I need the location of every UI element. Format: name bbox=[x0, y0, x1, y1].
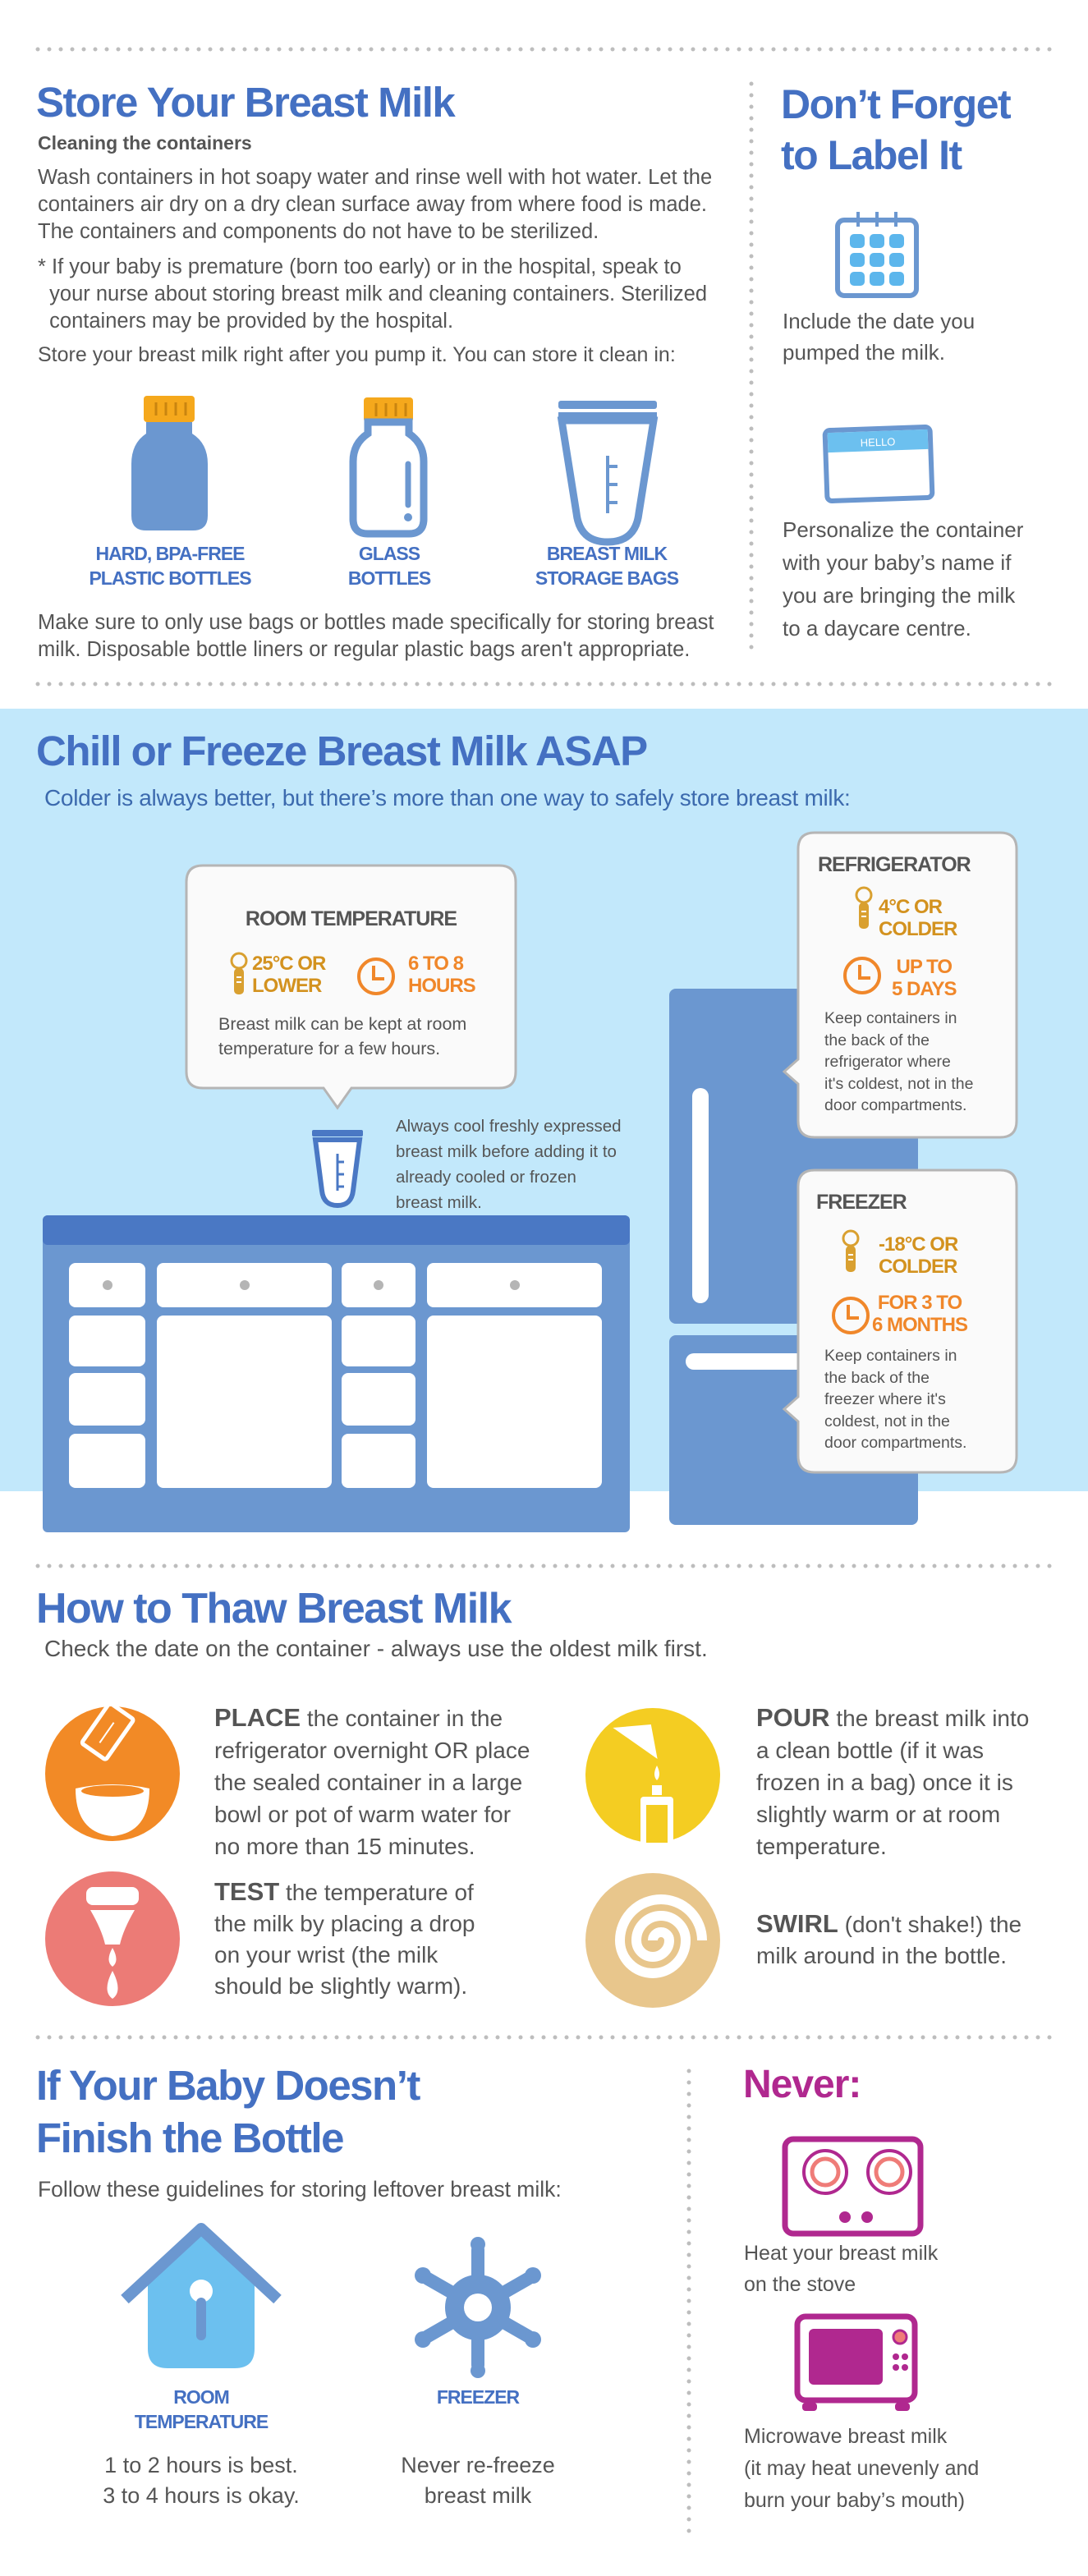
title: don't forget to label it bbox=[781, 81, 1012, 178]
text block: bags note: milk. Disposable bottle liners or regular plastic bags aren't appropriate. bbox=[38, 638, 690, 661]
stat: 4C: COLDER bbox=[879, 918, 957, 940]
icon: snowflake bbox=[415, 2237, 541, 2378]
label: storage bags bbox=[535, 543, 678, 589]
refrigerator bubble content bbox=[818, 853, 974, 1114]
title: chill or freeze: Chill or Freeze Breast Milk ASAP bbox=[36, 728, 647, 774]
step: place bbox=[214, 1703, 530, 1859]
text: fridge tip: Keep containers in bbox=[824, 1009, 957, 1027]
label: glass bottles: GLASS bbox=[359, 543, 420, 564]
bubble: refrigerator bbox=[784, 833, 1017, 1137]
step: place: bowl or pot of warm water for bbox=[214, 1802, 511, 1827]
step: pour: temperature. bbox=[756, 1834, 887, 1859]
subheading: cleaning the containers: Cleaning the containers bbox=[38, 132, 252, 154]
section background: chill or freeze bbox=[0, 709, 1088, 1491]
text block: premature note: containers may be provided by the hospital. bbox=[49, 310, 453, 333]
stat: 3 to 6 months bbox=[872, 1292, 967, 1336]
stat: 25C bbox=[252, 953, 326, 997]
text: fridge tip: door compartments. bbox=[824, 1096, 966, 1114]
subtitle: colder is better: Colder is always better, but there’s more than one way to safely store breast milk: bbox=[44, 785, 851, 810]
text: fridge tip bbox=[824, 1009, 974, 1114]
step: pour bbox=[756, 1703, 1029, 1859]
text: freezer tip: freezer where it's bbox=[824, 1390, 946, 1408]
text: freezer tip: door compartments. bbox=[824, 1434, 966, 1452]
label: storage bags: STORAGE BAGS bbox=[535, 567, 678, 589]
text: never refreeze: Never re-freeze bbox=[401, 2453, 555, 2477]
step: pour: slightly warm or at room bbox=[756, 1802, 1000, 1827]
text block: washing: Wash containers in hot soapy water and rinse well with hot water. Let the bbox=[38, 166, 712, 189]
text block: store right after: Store your breast milk right after you pump it. You can store it clean in: bbox=[38, 343, 676, 366]
text: microwave bbox=[744, 2425, 979, 2512]
text block: premature note bbox=[38, 255, 707, 333]
text: fridge tip: the back of the bbox=[824, 1031, 930, 1049]
text block: washing: containers air dry on a dry clean surface away from where food is made. bbox=[38, 193, 707, 216]
stat: 6 to 8 hours: HOURS bbox=[408, 975, 475, 997]
stat: up to 5 days: 5 DAYS bbox=[892, 978, 956, 1000]
icon: small bag on counter bbox=[312, 1130, 363, 1205]
text: microwave: burn your baby’s mouth) bbox=[744, 2489, 965, 2512]
icon: hello name tag bbox=[825, 427, 932, 501]
step: test: should be slightly warm). bbox=[214, 1973, 467, 1999]
stat: -18C: -18°C OR bbox=[879, 1233, 957, 1256]
step: swirl: milk around in the bottle. bbox=[756, 1943, 1007, 1968]
text: never refreeze bbox=[401, 2453, 555, 2508]
label: glass bottles bbox=[348, 543, 430, 589]
icon: house bbox=[125, 2227, 278, 2368]
icon: test (pink) bbox=[45, 1871, 180, 2006]
text: room hours: 3 to 4 hours is okay. bbox=[103, 2483, 300, 2508]
room temperature bubble content bbox=[218, 907, 475, 1058]
label: freezer: FREEZER bbox=[437, 2386, 519, 2408]
heading: freezer: FREEZER bbox=[816, 1191, 907, 1214]
step: place: the sealed container in a large bbox=[214, 1770, 522, 1795]
text: microwave: Microwave breast milk bbox=[744, 2425, 947, 2448]
label: plastic bottles: HARD, BPA-FREE bbox=[95, 543, 245, 564]
icon: stove bbox=[785, 2139, 920, 2234]
title: how to thaw: How to Thaw Breast Milk bbox=[36, 1585, 511, 1632]
icon: swirl (tan) bbox=[585, 1873, 720, 2008]
text: room temp: Breast milk can be kept at room bbox=[218, 1014, 466, 1034]
stat: 6 to 8 hours bbox=[408, 953, 475, 997]
step: test: on your wrist (the milk bbox=[214, 1942, 438, 1968]
text: include the date: Include the date you bbox=[783, 309, 975, 333]
stat: up to 5 days: UP TO bbox=[897, 956, 952, 978]
stat: 6 to 8 hours: 6 TO 8 bbox=[408, 953, 463, 975]
subtitle: check date: Check the date on the container - always use the oldest milk first. bbox=[44, 1636, 708, 1661]
stat: 25C: 25°C OR bbox=[252, 953, 325, 975]
label: plastic bottles bbox=[89, 543, 251, 589]
icons: thermometers and clocks bbox=[232, 888, 879, 1333]
step: pour: frozen in a bag) once it is bbox=[756, 1770, 1013, 1795]
text: freezer tip: coldest, not in the bbox=[824, 1412, 950, 1430]
text: freezer tip: the back of the bbox=[824, 1368, 930, 1386]
text: room temp bbox=[218, 1014, 466, 1058]
icon: glass bottle bbox=[353, 397, 424, 534]
text block: washing: The containers and components do not have to be sterilized. bbox=[38, 220, 599, 243]
text: room hours: 1 to 2 hours is best. bbox=[104, 2453, 298, 2477]
text: freezer tip bbox=[824, 1347, 966, 1452]
text: personalize: with your baby’s name if bbox=[783, 550, 1011, 575]
step: test bbox=[214, 1877, 475, 1999]
icon: pour (yellow) bbox=[585, 1708, 720, 1849]
text: freezer tip: Keep containers in bbox=[824, 1347, 957, 1365]
icon: hello name tag: HELLO bbox=[861, 435, 896, 449]
label: room temperature bbox=[135, 2386, 268, 2432]
text: personalize bbox=[783, 517, 1023, 641]
label: plastic bottles: PLASTIC BOTTLES bbox=[89, 567, 251, 589]
bubble: room temperature bbox=[186, 866, 516, 1108]
text: include the date bbox=[783, 309, 975, 365]
text: fridge tip: it's coldest, not in the bbox=[824, 1074, 974, 1092]
subtitle: follow guidelines: Follow these guidelines for storing leftover breast milk: bbox=[38, 2177, 562, 2202]
step: place: PLACE the container in the bbox=[214, 1703, 503, 1732]
text: always cool: already cooled or frozen bbox=[396, 1168, 576, 1187]
text: always cool: breast milk before adding it to bbox=[396, 1142, 617, 1161]
text: always cool: Always cool freshly expressed bbox=[396, 1117, 622, 1136]
label: glass bottles: BOTTLES bbox=[348, 567, 430, 589]
title: if your baby doesn't finish: Finish the Bottle bbox=[36, 2115, 343, 2161]
text: stove bbox=[744, 2242, 938, 2296]
icon: place (orange) bbox=[45, 1702, 180, 1841]
label: room temperature: TEMPERATURE bbox=[135, 2411, 268, 2432]
text: personalize: to a daycare centre. bbox=[783, 616, 971, 641]
text: personalize: you are bringing the milk bbox=[783, 583, 1015, 608]
step: pour: POUR the breast milk into bbox=[756, 1703, 1029, 1732]
stat: -18C: COLDER bbox=[879, 1256, 957, 1278]
stat: 3 to 6 months: FOR 3 TO bbox=[878, 1292, 962, 1314]
icon: storage bag bbox=[558, 401, 657, 542]
icon: calendar bbox=[838, 212, 916, 296]
icon: plastic bottle bbox=[131, 396, 208, 530]
freezer bubble content bbox=[816, 1191, 967, 1452]
step: test: TEST the temperature of bbox=[214, 1877, 474, 1906]
text: stove: Heat your breast milk bbox=[744, 2242, 938, 2265]
stat: -18C bbox=[879, 1233, 958, 1278]
text: personalize: Personalize the container bbox=[783, 517, 1023, 542]
text: stove: on the stove bbox=[744, 2273, 856, 2296]
stat: 3 to 6 months: 6 MONTHS bbox=[872, 1314, 967, 1336]
step: place: no more than 15 minutes. bbox=[214, 1834, 475, 1859]
icon: microwave bbox=[797, 2317, 915, 2411]
text: room hours bbox=[103, 2453, 300, 2508]
cabinet bbox=[43, 1215, 630, 1532]
step: pour: a clean bottle (if it was bbox=[756, 1738, 984, 1763]
stat: 4C: 4°C OR bbox=[879, 896, 942, 918]
title: don't forget to label it: Don’t Forget bbox=[781, 81, 1010, 127]
step: test: the milk by placing a drop bbox=[214, 1911, 475, 1936]
text block: bags note: Make sure to only use bags or bottles made specifically for storing breast bbox=[38, 611, 714, 634]
text: always cool bbox=[396, 1117, 622, 1212]
step: swirl bbox=[756, 1909, 1021, 1968]
title: if your baby doesn't finish bbox=[36, 2062, 420, 2161]
stat: 4C bbox=[879, 896, 957, 940]
step: swirl: SWIRL (don't shake!) the bbox=[756, 1909, 1021, 1938]
text block: bags note bbox=[38, 611, 714, 661]
text block: washing bbox=[38, 166, 712, 243]
text block: premature note: * If your baby is premature (born too early) or in the hospital, speak to bbox=[38, 255, 682, 278]
step: place: refrigerator overnight OR place bbox=[214, 1738, 530, 1763]
text: always cool: breast milk. bbox=[396, 1193, 482, 1212]
stat: 25C: LOWER bbox=[252, 975, 321, 997]
label: storage bags: BREAST MILK bbox=[547, 543, 667, 564]
text: fridge tip: refrigerator where bbox=[824, 1053, 951, 1071]
text: include the date: pumped the milk. bbox=[783, 340, 945, 365]
heading: refrigerator: REFRIGERATOR bbox=[818, 853, 971, 876]
title: don't forget to label it: to Label It bbox=[781, 132, 962, 178]
label: room temperature: ROOM bbox=[173, 2386, 229, 2408]
title: store your breast milk: Store Your Breast Milk bbox=[36, 79, 454, 126]
title: never: Never: bbox=[743, 2063, 861, 2106]
text block: premature note: your nurse about storing breast milk and cleaning containers. Sterilized bbox=[49, 282, 707, 305]
bubble: freezer bbox=[784, 1170, 1017, 1472]
fridge bbox=[669, 989, 918, 1525]
text: never refreeze: breast milk bbox=[425, 2483, 531, 2508]
text: room temp: temperature for a few hours. bbox=[218, 1039, 440, 1058]
title: if your baby doesn't finish: If Your Baby Doesn’t bbox=[36, 2062, 420, 2109]
stat: up to 5 days bbox=[892, 956, 957, 1000]
heading: room temperature: ROOM TEMPERATURE bbox=[246, 907, 457, 930]
text: microwave: (it may heat unevenly and bbox=[744, 2457, 979, 2480]
